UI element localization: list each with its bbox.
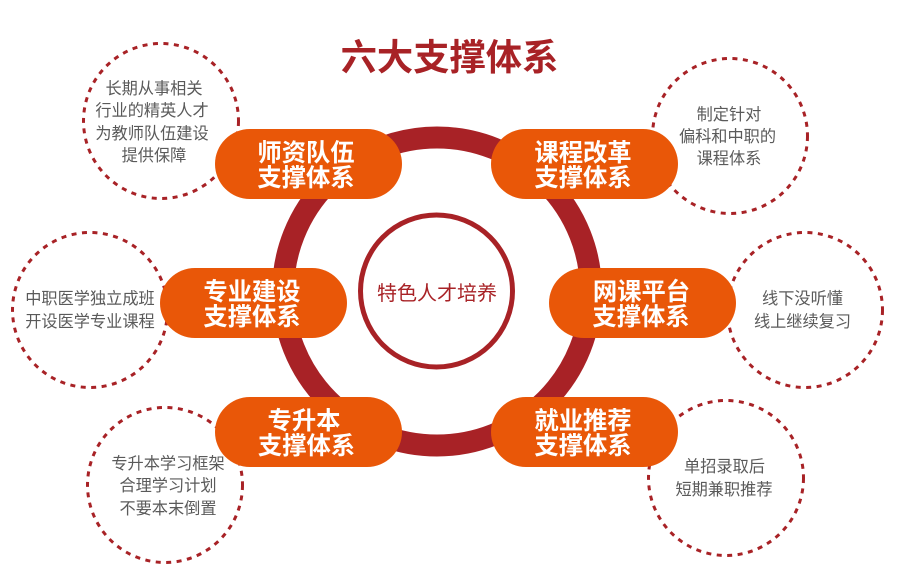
center circle bbox=[360, 215, 512, 367]
bubble: employment: 单招录取后 bbox=[684, 458, 765, 476]
bubble: upgrade bbox=[88, 408, 242, 562]
bubble: curriculum bbox=[652, 58, 808, 214]
bubble: employment bbox=[648, 400, 804, 556]
bubble: upgrade: 合理学习计划 bbox=[119, 477, 217, 495]
pill: major: 支撑体系 bbox=[203, 304, 301, 331]
bubble: upgrade: 不要本末倒置 bbox=[119, 500, 217, 518]
pill: curriculum: 支撑体系 bbox=[534, 165, 632, 192]
pill: upgrade bbox=[215, 397, 402, 467]
bubble: online: 线下没听懂 bbox=[762, 290, 843, 308]
pill: employment: 支撑体系 bbox=[534, 433, 632, 460]
pill: online: 支撑体系 bbox=[592, 304, 690, 331]
bubble: online: 线上继续复习 bbox=[754, 313, 851, 331]
pill: major bbox=[160, 268, 347, 338]
bubble: major: 开设医学专业课程 bbox=[25, 313, 155, 331]
bubble: teachers bbox=[84, 44, 238, 198]
bubble: employment: 短期兼职推荐 bbox=[675, 481, 773, 499]
bubble: curriculum: 偏科和中职的 bbox=[679, 128, 776, 146]
pill: employment bbox=[491, 397, 678, 467]
pill: online: 网课平台 bbox=[593, 278, 690, 306]
central ring bbox=[283, 138, 591, 446]
pill: employment: 就业推荐 bbox=[534, 408, 632, 435]
bubble: online bbox=[728, 232, 882, 388]
pill: curriculum bbox=[491, 129, 678, 199]
pill: upgrade: 支撑体系 bbox=[258, 433, 355, 460]
bubble: teachers: 为教师队伍建设 bbox=[95, 125, 209, 143]
pill: teachers bbox=[215, 129, 402, 199]
center circle: 特色人才培养 bbox=[377, 282, 497, 305]
bubble: curriculum: 制定针对 bbox=[697, 106, 761, 124]
pill: teachers: 师资队伍 bbox=[257, 140, 355, 167]
bubble: major bbox=[12, 232, 168, 388]
bubble: upgrade: 专升本学习框架 bbox=[111, 455, 225, 473]
pill: upgrade: 专升本 bbox=[268, 408, 340, 435]
pill: major: 专业建设 bbox=[203, 279, 301, 306]
title: 六大支撑体系 bbox=[341, 37, 558, 78]
bubble: major: 中职医学独立成班 bbox=[25, 290, 155, 308]
bubble: teachers: 提供保障 bbox=[122, 147, 186, 165]
bubble: teachers: 行业的精英人才 bbox=[95, 102, 209, 120]
pill: teachers: 支撑体系 bbox=[257, 165, 355, 192]
pill: curriculum: 课程改革 bbox=[534, 140, 632, 167]
pill: online bbox=[549, 268, 736, 338]
bubble: curriculum: 课程体系 bbox=[697, 150, 761, 168]
bubble: teachers: 长期从事相关 bbox=[105, 80, 203, 98]
